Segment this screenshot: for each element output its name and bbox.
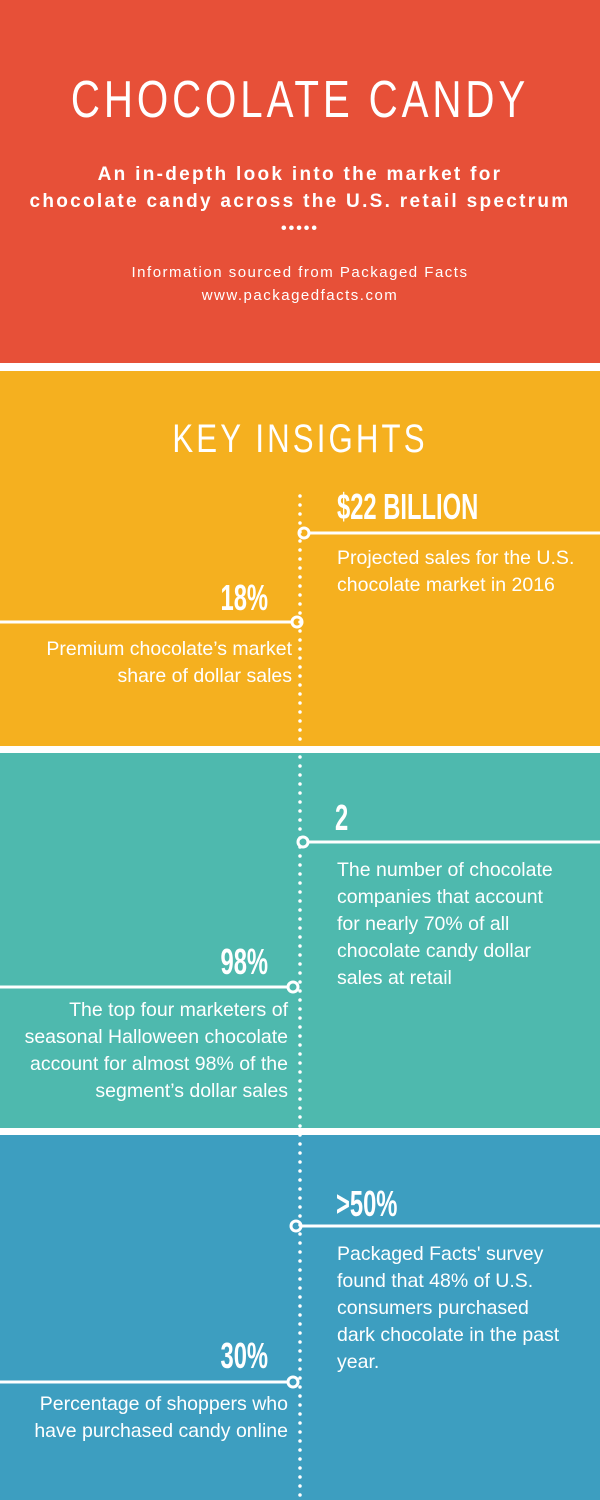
heading: KEY INSIGHTS xyxy=(172,417,428,461)
stat: 2: 2 xyxy=(335,797,348,838)
panel: teal xyxy=(0,753,600,1128)
title: CHOCOLATE CANDY xyxy=(71,71,529,129)
text: online xyxy=(34,1393,288,1442)
text: companies: for nearly 70% of all xyxy=(337,913,509,935)
stat: 98%: 98% xyxy=(220,941,268,982)
subtitle: An in-depth look into the market for xyxy=(98,164,502,185)
text: halloween: The top four marketers of xyxy=(69,999,288,1021)
panel: key insights yellow xyxy=(0,371,600,746)
text: online: have purchased candy online xyxy=(34,1420,288,1442)
text: companies xyxy=(337,859,553,989)
text: projected sales: Projected sales for the U.S. xyxy=(337,547,574,569)
stat: $22 billion: $22 BILLION xyxy=(337,486,478,527)
text: halloween: segment’s dollar sales xyxy=(95,1080,288,1102)
text: companies: chocolate candy dollar xyxy=(337,940,531,962)
text: projected sales xyxy=(337,547,574,596)
text: premium share xyxy=(46,638,292,687)
source text: Information sourced from Packaged Facts xyxy=(132,264,468,281)
text: dark chocolate: found that 48% of U.S. xyxy=(337,1270,533,1292)
text: halloween: seasonal Halloween chocolate xyxy=(25,1026,288,1048)
text: online: Percentage of shoppers who xyxy=(40,1393,288,1415)
dots divider: ••••• xyxy=(281,220,319,237)
text: halloween xyxy=(25,999,288,1102)
text: companies: The number of chocolate xyxy=(337,859,553,881)
stat: 18%: 18% xyxy=(220,577,268,618)
stat: 30%: 30% xyxy=(220,1335,268,1376)
text: dark chocolate xyxy=(337,1243,560,1373)
subtitle xyxy=(29,164,571,212)
text: halloween: account for almost 98% of the xyxy=(30,1053,288,1075)
text: companies: sales at retail xyxy=(337,967,452,989)
subtitle: chocolate candy across the U.S. retail spectrum xyxy=(29,191,571,212)
text: dark chocolate: Packaged Facts' survey xyxy=(337,1243,543,1265)
text: dark chocolate: consumers purchased xyxy=(337,1297,529,1319)
source text xyxy=(132,264,468,304)
text: projected sales: chocolate market in 2016 xyxy=(337,574,555,596)
panel: header xyxy=(0,0,600,363)
text: premium share: share of dollar sales xyxy=(117,665,292,687)
stat: >50%: >50% xyxy=(336,1183,397,1224)
text: companies: companies that account xyxy=(337,886,543,908)
text: dark chocolate: dark chocolate in the past xyxy=(337,1324,559,1346)
text: dark chocolate: year. xyxy=(337,1351,379,1373)
source text: www.packagedfacts.com xyxy=(202,287,398,304)
panel: blue xyxy=(0,1135,600,1500)
text: premium share: Premium chocolate’s market xyxy=(46,638,292,660)
